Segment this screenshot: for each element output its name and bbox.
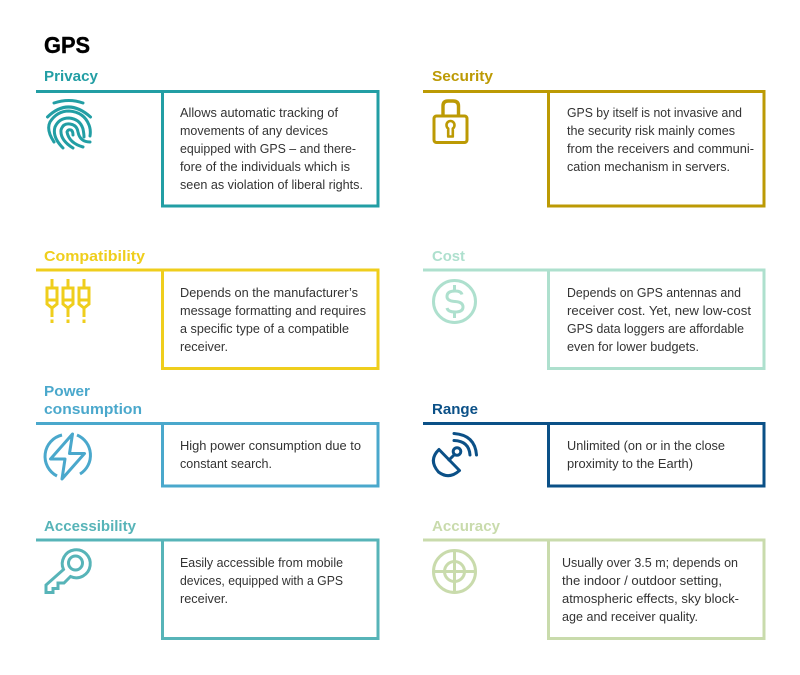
text: range: proximity to the Earth) (567, 457, 693, 471)
frame: cost (423, 270, 764, 368)
text: range: Unlimited (on or in the close (567, 439, 725, 453)
frame: power consumption (36, 424, 378, 486)
text: compatibility: Depends on the manufacturer’s (180, 286, 358, 300)
text: compatibility (180, 286, 366, 354)
icon: key (46, 550, 90, 592)
text: cost: GPS data loggers are affordable (567, 322, 744, 336)
text: accessibility: devices, equipped with a GPS (180, 574, 343, 588)
panel: privacy (36, 68, 378, 206)
text: security: cation mechanism in servers. (567, 160, 730, 174)
icon: target (434, 550, 476, 592)
heading: security: Security (432, 68, 494, 85)
text: accuracy: atmospheric effects, sky block- (562, 592, 739, 606)
icon: fingerprint (48, 100, 90, 148)
text: accessibility: receiver. (180, 592, 228, 606)
text: security (567, 106, 754, 174)
heading: power consumption: consumption (44, 401, 142, 418)
heading: cost: Cost (432, 248, 465, 265)
title: GPS (44, 32, 90, 58)
heading: accessibility: Accessibility (44, 518, 137, 535)
text: power consumption: constant search. (180, 457, 272, 471)
text: accuracy: Usually over 3.5 m; depends on (562, 556, 738, 570)
text: accuracy (562, 556, 739, 624)
panel: cost (423, 248, 764, 368)
text: power consumption: High power consumption due to (180, 439, 361, 453)
panel: security (423, 68, 764, 206)
text: compatibility: a specific type of a compatible (180, 322, 349, 336)
text: range (567, 439, 725, 471)
panel: range (423, 401, 764, 486)
frame: security (423, 92, 764, 206)
heading: range: Range (432, 401, 478, 418)
text: accuracy: the indoor / outdoor setting, (562, 574, 722, 588)
heading: power consumption: Power (44, 383, 90, 400)
text: cost: Depends on GPS antennas and (567, 286, 741, 300)
text: power consumption (180, 439, 361, 471)
frame: accuracy (423, 540, 764, 638)
icon: padlock (434, 101, 467, 142)
text: privacy: equipped with GPS – and there- (180, 142, 356, 156)
text: privacy: Allows automatic tracking of (180, 106, 339, 120)
heading: privacy: Privacy (44, 68, 99, 85)
text: security: the security risk mainly comes (567, 124, 735, 138)
text: security: GPS by itself is not invasive and (567, 106, 742, 120)
text: cost: receiver cost. Yet, new low-cost (567, 304, 752, 318)
text: cost: even for lower budgets. (567, 340, 699, 354)
heading: compatibility: Compatibility (44, 248, 146, 265)
frame: compatibility (36, 270, 378, 368)
text: accessibility (180, 556, 343, 606)
text: compatibility: message formatting and requires (180, 304, 366, 318)
text: privacy: seen as violation of liberal rights. (180, 178, 363, 192)
heading: power consumption (44, 383, 142, 418)
text: privacy (180, 106, 363, 192)
text: security: from the receivers and communi- (567, 142, 754, 156)
icon: connectors (47, 279, 89, 323)
text: cost (567, 286, 752, 354)
icon: dollar coin (434, 280, 476, 322)
text: compatibility: receiver. (180, 340, 228, 354)
panel: accuracy (423, 518, 764, 638)
frame: accessibility (36, 540, 378, 638)
text: privacy: fore of the individuals which is (180, 160, 350, 174)
panel: power consumption (36, 383, 378, 486)
frame: range (423, 424, 764, 486)
heading: accuracy: Accuracy (432, 518, 501, 535)
panel: compatibility (36, 248, 378, 368)
frame: privacy (36, 92, 378, 206)
text: privacy: movements of any devices (180, 124, 328, 138)
text: accuracy: age and receiver quality. (562, 610, 698, 624)
panel: accessibility (36, 518, 378, 638)
text: accessibility: Easily accessible from mobile (180, 556, 343, 570)
icon: satellite dish (433, 434, 476, 476)
icon: power bolt (45, 434, 90, 479)
